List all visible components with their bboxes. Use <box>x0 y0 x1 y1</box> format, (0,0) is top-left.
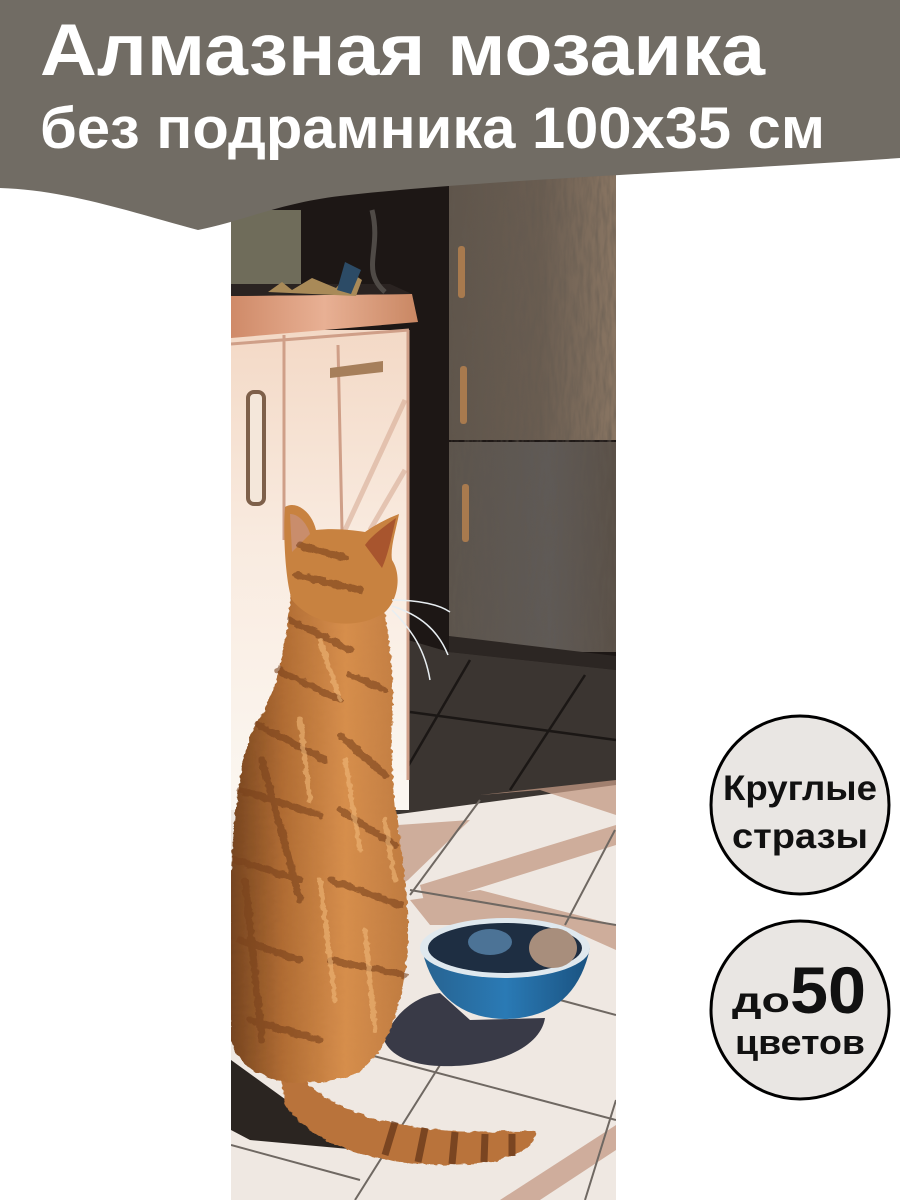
badge: round rhinestones <box>711 716 889 894</box>
title: Алмазная мозаика <box>40 10 767 91</box>
counter clutter <box>268 277 362 296</box>
cat head <box>284 505 399 624</box>
window corner <box>231 210 301 286</box>
badge: up to 50 colours <box>711 921 889 1099</box>
wall background <box>233 186 616 786</box>
cat tail <box>281 1080 536 1166</box>
cat whiskers <box>392 600 450 680</box>
panel: cat kitchen artwork <box>229 170 616 1200</box>
cat ear inner <box>290 514 310 552</box>
cabinet handle top <box>330 361 383 378</box>
badge: up to 50 colours: 50 <box>790 953 866 1027</box>
badge: up to 50 colours: до <box>732 981 790 1020</box>
badge: up to 50 colours: цветов <box>735 1024 865 1062</box>
floor dark <box>392 640 616 818</box>
badge: round rhinestones: Круглые <box>723 769 877 808</box>
floor tile lines dark <box>400 660 616 790</box>
header banner <box>0 0 900 230</box>
bowl shadow <box>384 993 545 1066</box>
subtitle: без подрамника 100х35 см <box>40 96 825 161</box>
bowl <box>420 918 590 1019</box>
fridge lower door <box>449 442 616 652</box>
cord behind <box>372 210 385 292</box>
fridge handles <box>458 246 469 542</box>
countertop <box>231 294 418 338</box>
tail stripes <box>385 1122 512 1164</box>
cat highlights <box>300 640 395 1030</box>
cat body <box>229 590 408 1083</box>
cabinet dividers and streaks <box>231 330 409 780</box>
fridge base <box>449 636 616 670</box>
cat dark stripes <box>236 545 405 1040</box>
cabinet body <box>231 330 409 810</box>
fridge upper door <box>449 170 616 440</box>
door grain texture <box>451 176 616 442</box>
cabinet handle left <box>248 392 264 504</box>
floor light <box>231 785 616 1200</box>
floor tile lines light <box>231 800 616 1200</box>
cat shadow <box>231 1060 346 1149</box>
sun stripes on floor <box>398 780 616 1200</box>
badge: round rhinestones: стразы <box>732 817 868 856</box>
